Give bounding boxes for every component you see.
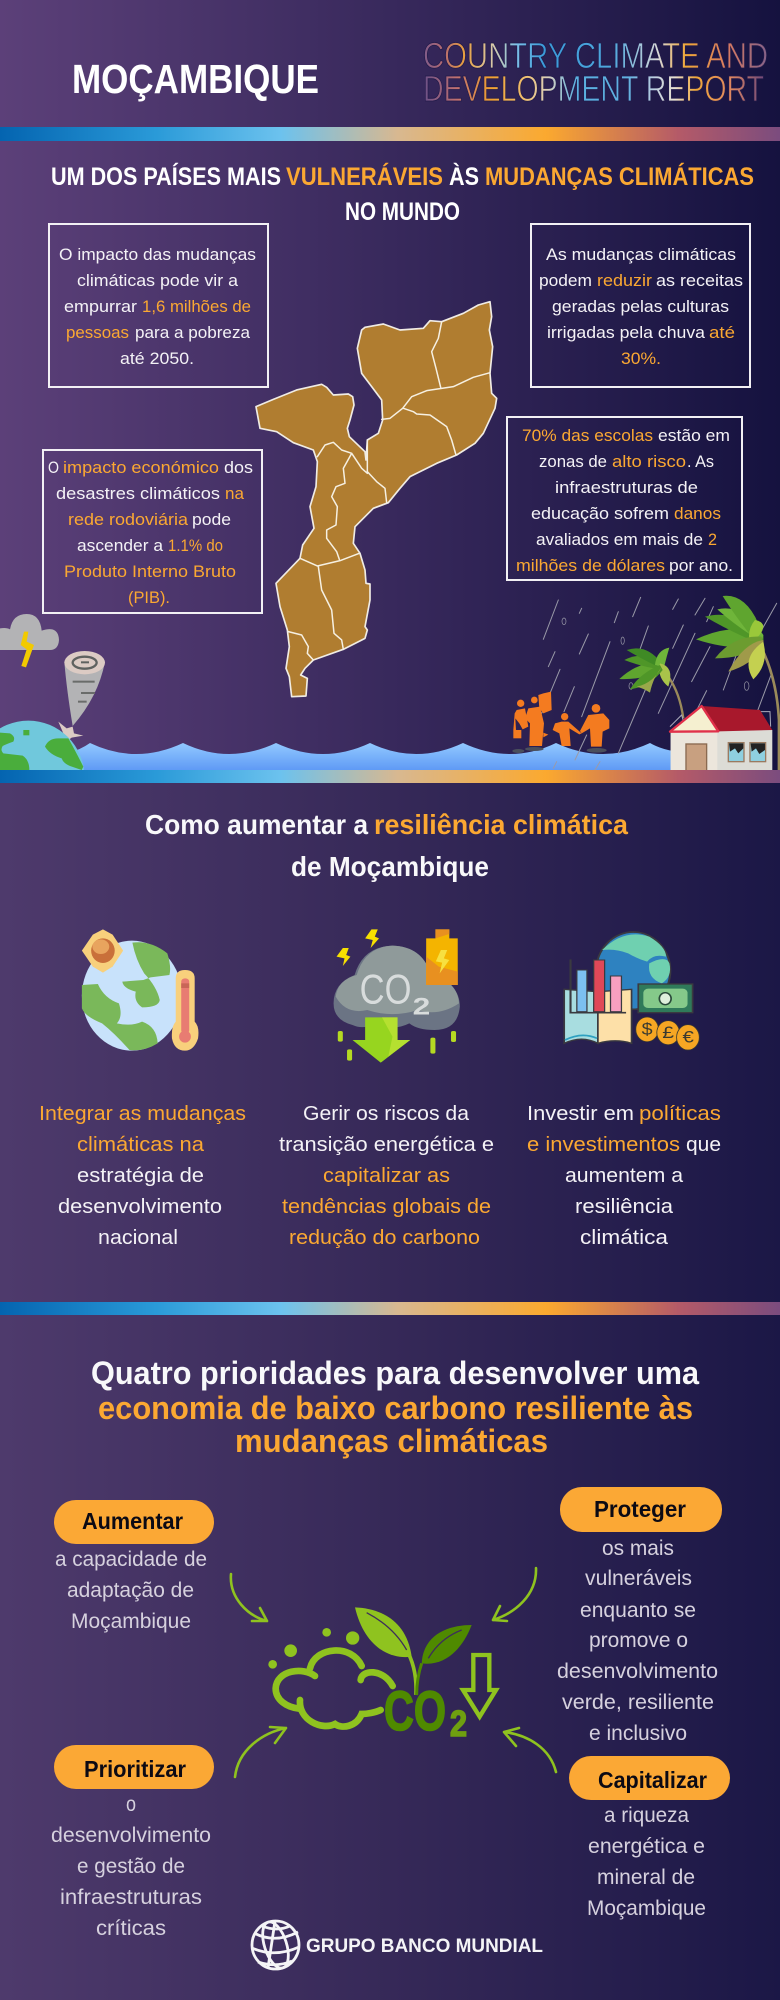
column: invest: políticas [639,1102,721,1125]
priority: Capitalizar [569,1756,730,1920]
currency symbols [642,1021,694,1047]
column: manage: transição energética e [279,1133,494,1156]
panel: crop revenue: As mudanças climáticas [546,246,736,264]
priority: Proteger: desenvolvimento [557,1660,718,1683]
priority: Prioritizar: e gestão de [77,1855,185,1878]
column: integrate: desenvolvimento [58,1195,222,1218]
priority: Prioritizar: desenvolvimento [51,1824,211,1847]
panel: schools: avaliados em mais de [536,531,703,549]
priority: Proteger: verde, resiliente [562,1691,714,1714]
panel: road network: Produto Interno Bruto [64,563,236,581]
heading: four priorities: economia de baixo carbono resiliente às [98,1390,693,1426]
priority: Proteger: promove o [589,1629,688,1652]
CO2 label: CO [360,966,411,1013]
priority: Prioritizar: críticas [96,1917,166,1940]
column: integrate [39,1102,246,1249]
column: invest: e investimentos [527,1133,680,1156]
panel: road network: O [48,459,59,477]
earth globe [0,720,84,770]
rain [542,597,777,770]
panel: crop revenue: 30%. [621,350,661,368]
heading: most vulnerable countries [51,162,754,226]
panel: road network: na [225,485,245,503]
panel: poverty: 1,6 milhões de [142,298,251,316]
column: invest: aumentem a [565,1164,684,1187]
panel: road network: ascender a [77,537,164,555]
panel: schools: milhões de dólares [516,557,665,575]
currency symbols: £ [662,1024,675,1042]
panel: poverty: empurrar [64,298,138,316]
panel: poverty: para a pobreza [135,324,251,342]
panel: road network: pode [192,511,231,529]
footer logo [252,1919,543,1971]
heading: climate resilience [145,809,628,882]
panel: schools: zonas de [539,453,607,471]
column: invest: Investir em [527,1102,634,1125]
priority: Prioritizar: o [126,1793,136,1816]
priority: Proteger: e inclusivo [589,1722,687,1745]
panel: road network: 1.1% do [168,537,223,555]
panel: schools: alto risco [612,453,686,471]
CO2 letters: 2 [450,1703,467,1744]
column: integrate: Integrar as mudanças [39,1102,246,1125]
arrows toward centre [231,1568,556,1777]
panel: crop revenue: geradas pelas culturas [552,298,729,316]
divider stripes [0,127,780,1315]
icon: green CO2 logo [268,1607,496,1744]
panel: poverty: climáticas pode vir a [77,272,239,290]
icon: CO2 cloud [334,929,460,1063]
column: integrate: climáticas na [77,1133,205,1156]
panel: poverty: até 2050. [120,350,194,368]
heading: climate resilience: Como aumentar a [145,809,368,840]
panel: schools: . As [687,453,714,471]
icon: finance, globe and book [564,932,699,1050]
panel: schools [507,417,742,580]
priority: Proteger: Proteger [594,1496,686,1522]
column: manage: tendências globais de [282,1195,491,1218]
heading: climate resilience: de Moçambique [291,851,489,882]
panel: crop revenue: até [709,324,735,342]
panel: schools: educação sofrem [531,505,669,523]
CO2 label: 2 [413,992,430,1020]
currency symbols: € [682,1029,694,1047]
heading: four priorities [91,1355,699,1459]
icon: earth and thermometer [82,929,198,1051]
panel: poverty: pessoas [66,324,129,342]
panel: crop revenue: irrigadas pela chuva [547,324,706,342]
heading: most vulnerable countries: UM DOS PAÍSES MAIS [51,162,281,191]
illustration: flooding scene [0,596,780,770]
column: invest: climática [580,1226,669,1249]
column: manage: capitalizar as [323,1164,450,1187]
header [72,35,768,109]
footer logo: GRUPO BANCO MUNDIAL [306,1935,543,1957]
column: integrate: estratégia de [77,1164,204,1187]
priority: Proteger [557,1487,722,1745]
currency symbols: $ [642,1021,653,1039]
water waves [70,743,680,770]
priority: Proteger: vulneráveis [585,1567,692,1590]
panel: schools: 2 [708,531,717,549]
heading: most vulnerable countries: ÀS [449,162,479,191]
panel: road network: impacto económico [63,459,219,477]
panel: poverty [49,224,268,387]
panel: road network: (PIB). [128,589,170,607]
heading: most vulnerable countries: NO MUNDO [345,198,460,226]
report title [423,35,768,109]
priority: Capitalizar: Capitalizar [598,1767,707,1793]
priority: Aumentar: a capacidade de [55,1548,207,1571]
priority: Prioritizar [51,1745,214,1940]
priority: Aumentar: adaptação de [67,1579,194,1602]
map of Mozambique [256,302,497,697]
priority: Aumentar: Moçambique [71,1610,191,1633]
column: manage [279,1102,494,1249]
panel: schools: por ano. [669,557,733,575]
storm cloud with lightning [0,614,59,667]
priority: Capitalizar: mineral de [597,1866,695,1889]
heading: four priorities: mudanças climáticas [235,1423,548,1459]
panel: poverty: O impacto das mudanças [59,246,256,264]
icon: globe [252,1919,299,1971]
heading: most vulnerable countries: VULNERÁVEIS [286,162,443,191]
column: manage: redução do carbono [289,1226,480,1249]
panel: road network: dos [224,459,253,477]
panel: schools: infraestruturas de [555,479,698,497]
panel: crop revenue [531,224,750,387]
heading: climate resilience: resiliência climática [374,809,628,840]
panel: schools: 70% das escolas [522,427,653,445]
CO2 letters: CO [384,1679,446,1742]
panel: schools: estão em [658,427,730,445]
priority: Prioritizar: Prioritizar [84,1756,186,1782]
priority: Prioritizar: infraestruturas [60,1886,202,1909]
column: integrate: nacional [98,1226,178,1249]
large palm tree [696,596,779,770]
panel: schools: danos [674,505,721,523]
priority: Aumentar: Aumentar [82,1508,183,1534]
heading: four priorities: Quatro prioridades para desenvolver uma [91,1355,699,1391]
priority: Capitalizar: a riqueza [604,1804,689,1827]
title: Moçambique: MOÇAMBIQUE [72,56,319,102]
column: invest [527,1102,721,1249]
panel: crop revenue: as receitas [656,272,743,290]
people in flood [512,692,609,753]
column: invest: que [686,1133,721,1156]
column: manage: Gerir os riscos da [303,1102,470,1125]
house [670,706,772,772]
panel: road network [43,450,262,613]
priority: Proteger: enquanto se [580,1599,696,1622]
panel: crop revenue: podem [539,272,592,290]
priority: Capitalizar: Moçambique [587,1897,706,1920]
small palm tree [619,648,683,718]
tornado [58,651,105,741]
column: invest: resiliência [575,1195,674,1218]
priority: Proteger: os mais [602,1537,674,1560]
panel: road network: rede rodoviária [68,511,189,529]
panel: crop revenue: reduzir [597,272,653,290]
panel: road network: desastres climáticos [56,485,220,503]
priority: Aumentar [54,1500,214,1633]
priority: Capitalizar: energética e [588,1835,705,1858]
